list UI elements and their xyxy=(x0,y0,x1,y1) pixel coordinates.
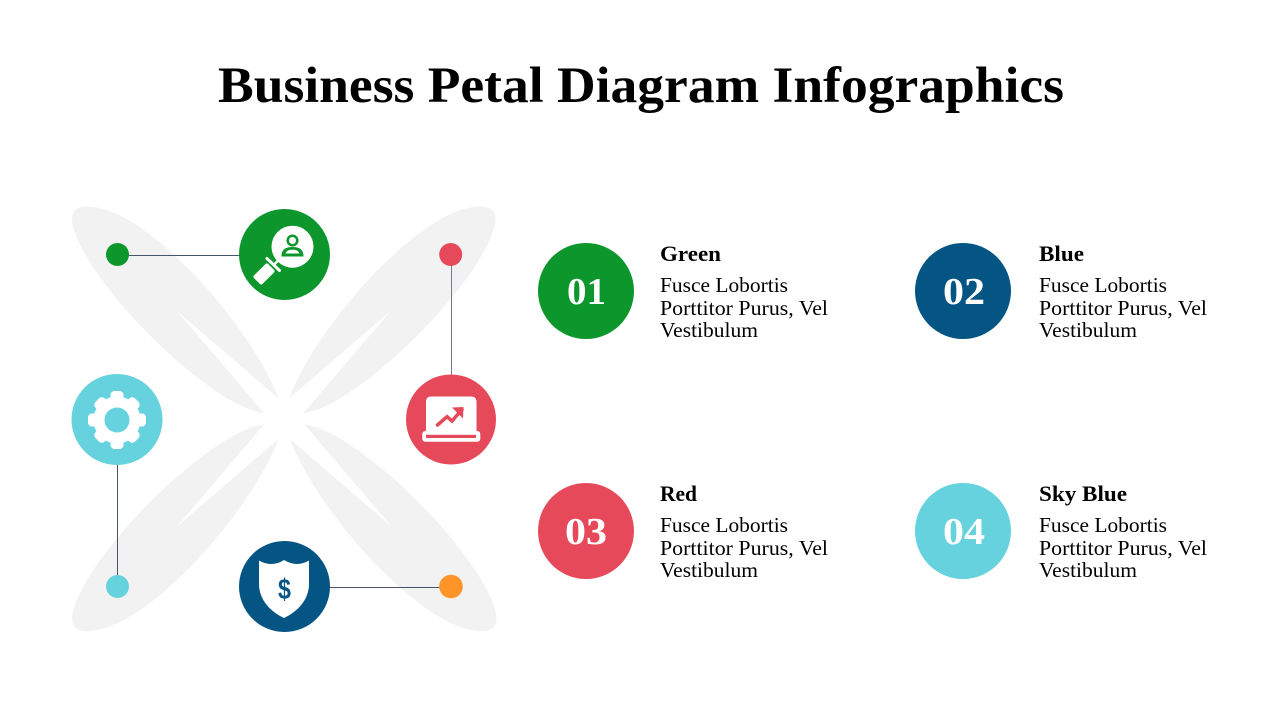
connector: red xyxy=(450,262,452,377)
heading: green: Green xyxy=(660,241,721,266)
item 04: sky blue xyxy=(915,481,1207,582)
body text: green xyxy=(660,273,828,342)
dot: orange xyxy=(439,575,463,598)
body text: blue: Porttitor Purus, Vel xyxy=(1039,296,1207,320)
number badge 03 xyxy=(538,483,634,579)
petal: top left xyxy=(72,206,278,413)
number badge 04: 04 xyxy=(943,511,985,553)
connector: navy xyxy=(328,586,442,588)
petal diagram xyxy=(72,206,497,632)
body text: green: Porttitor Purus, Vel xyxy=(660,296,828,320)
body text: red: Porttitor Purus, Vel xyxy=(660,536,828,560)
body text: red xyxy=(660,513,828,582)
heading: blue: Blue xyxy=(1039,241,1084,266)
icon: gear xyxy=(72,374,162,465)
connector: sky blue xyxy=(116,462,118,578)
item 03: red xyxy=(538,481,828,582)
body text: sky blue: Fusce Lobortis xyxy=(1039,513,1167,537)
body text: sky blue: Porttitor Purus, Vel xyxy=(1039,536,1207,560)
body text: red: Fusce Lobortis xyxy=(660,513,788,537)
body text: red: Vestibulum xyxy=(660,558,758,582)
item 01: green xyxy=(538,241,828,342)
number badge 02: 02 xyxy=(943,271,985,313)
icon: laptop with rising arrow xyxy=(406,374,496,464)
body text: blue: Fusce Lobortis xyxy=(1039,273,1167,297)
petal: top right xyxy=(289,206,496,413)
body text: sky blue xyxy=(1039,513,1207,582)
heading: red: Red xyxy=(660,481,697,506)
dot: red xyxy=(439,243,462,266)
body text: sky blue: Vestibulum xyxy=(1039,558,1137,582)
body text: green: Fusce Lobortis xyxy=(660,273,788,297)
dot: green xyxy=(106,243,129,266)
number badge 03: 03 xyxy=(565,511,607,553)
number badge 01: 01 xyxy=(567,271,606,313)
item 02: blue xyxy=(915,241,1207,342)
body text: blue xyxy=(1039,273,1207,342)
body text: blue: Vestibulum xyxy=(1039,318,1137,342)
number badge 02 xyxy=(915,243,1011,339)
body text: green: Vestibulum xyxy=(660,318,758,342)
number badge 04 xyxy=(915,483,1011,579)
petal: bottom left xyxy=(72,424,278,631)
number badge 01 xyxy=(538,243,634,339)
dot: sky blue xyxy=(106,575,129,598)
title: Business Petal Diagram Infographics xyxy=(218,58,1064,114)
icon: magnifier with person xyxy=(239,209,330,300)
heading: sky blue: Sky Blue xyxy=(1039,481,1127,506)
petal: bottom right xyxy=(290,424,497,631)
icon: shield with dollar: $ xyxy=(278,572,291,606)
connector: green xyxy=(125,254,242,256)
icon: shield with dollar xyxy=(239,541,330,632)
